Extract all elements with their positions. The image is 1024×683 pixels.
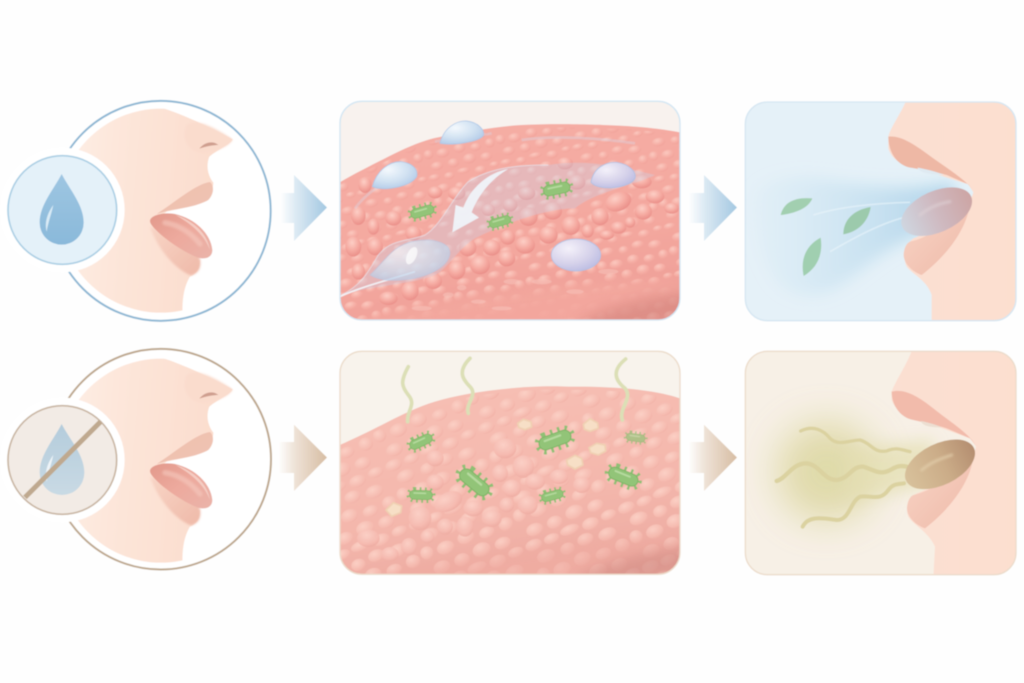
- tongue: [904, 439, 976, 490]
- face profile: [50, 108, 233, 317]
- food debris: [386, 419, 606, 516]
- droplets: [370, 121, 635, 280]
- tongue surface: [340, 124, 680, 322]
- arrow: moist row first: [280, 175, 327, 241]
- panel: dry tongue surface: [339, 350, 681, 576]
- tongue surface: [340, 386, 680, 575]
- lower texture highlights: [412, 269, 618, 311]
- face profile: [892, 351, 1020, 578]
- panel: moist mouth profile: [0, 101, 271, 321]
- papillae: [357, 438, 590, 562]
- arrow: saliva flow: [452, 169, 508, 232]
- panel: moist tongue surface: [339, 100, 681, 321]
- arrow: moist row second: [688, 175, 737, 241]
- infographic: [6, 99, 1017, 576]
- panel: bad breath: [745, 351, 1020, 578]
- bacteria: [406, 426, 647, 504]
- tongue: [902, 187, 972, 236]
- outer circle: [51, 101, 271, 321]
- saliva film: [342, 163, 655, 295]
- breath stream: [780, 177, 959, 293]
- odor waves: [777, 428, 910, 527]
- stink wisps: [403, 358, 628, 422]
- icon: water drop badge: [0, 148, 125, 272]
- panel: fresh breath: [745, 101, 1020, 325]
- icon: crossed out drop badge: [0, 398, 125, 522]
- odor cloud: [777, 422, 933, 522]
- face profile: [888, 101, 1020, 325]
- arrow: dry row second: [688, 425, 737, 491]
- outer circle: [50, 349, 271, 569]
- face profile: [50, 358, 233, 567]
- bumps: [345, 157, 679, 305]
- arrow: dry row first: [278, 425, 327, 491]
- bacteria: [408, 179, 573, 231]
- leaves: [781, 198, 871, 276]
- panel: dry mouth profile: [0, 349, 271, 569]
